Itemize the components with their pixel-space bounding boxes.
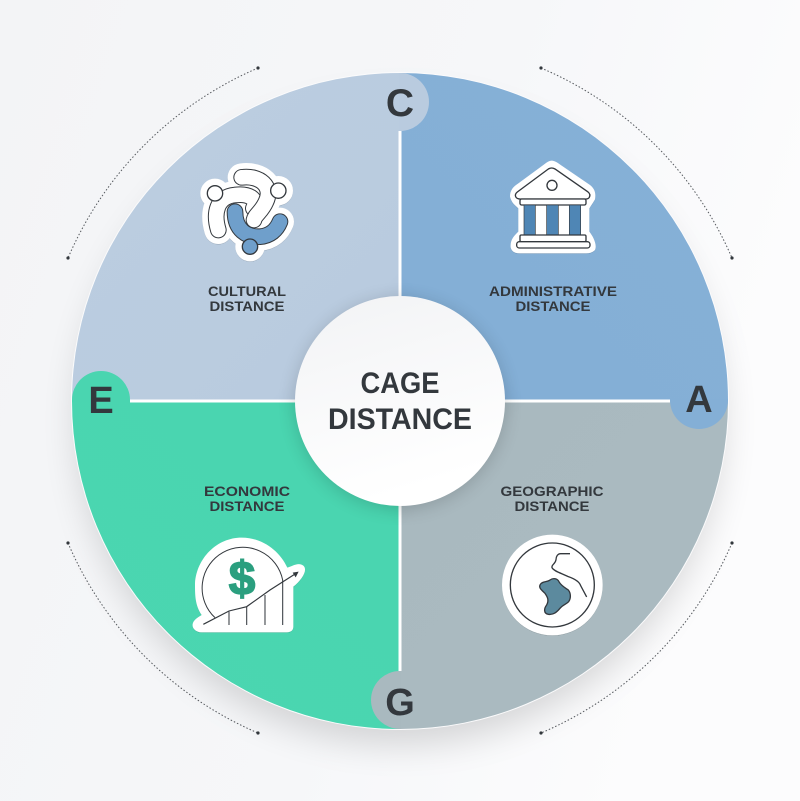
icon: government building: [510, 161, 596, 253]
badge: E: E: [88, 380, 114, 422]
title: DISTANCE: [328, 403, 472, 436]
centre circle: [295, 296, 505, 506]
text: administrative distance: ADMINISTRATIVE: [489, 283, 617, 299]
text: geographic distance: GEOGRAPHIC: [500, 483, 604, 499]
badge: A: [670, 379, 728, 429]
text: geographic distance: DISTANCE: [514, 498, 590, 514]
text: administrative distance: [489, 283, 617, 314]
title: CAGE: [360, 367, 440, 400]
dotted arc: top left: [66, 66, 260, 260]
badge: C: [386, 73, 429, 131]
text: economic distance: DISTANCE: [210, 498, 284, 514]
panel: geographic quadrant: [400, 401, 728, 729]
text: cultural distance: [208, 283, 286, 314]
text: geographic distance: [500, 483, 604, 514]
dotted arc: bottom left: [66, 541, 260, 735]
text: cultural distance: CULTURAL: [208, 283, 286, 299]
icon: dollar growth chart: [193, 538, 305, 632]
icon: dollar growth chart: $: [229, 553, 255, 606]
icon: people circle: [205, 177, 288, 257]
white dividers: [130, 131, 670, 671]
icon: globe: [502, 535, 603, 635]
text: economic distance: ECONOMIC: [204, 483, 290, 499]
panel: administrative quadrant: [400, 73, 728, 401]
title: [328, 367, 472, 436]
badge: A: A: [685, 379, 713, 421]
panel: economic quadrant: [72, 401, 400, 729]
centre circle shadow: [295, 299, 505, 509]
badge: C: C: [386, 82, 414, 125]
text: administrative distance: DISTANCE: [516, 298, 590, 314]
white circle rim: [71, 72, 729, 730]
dotted arc: top right: [539, 66, 734, 260]
circle drop shadow: [78, 100, 722, 744]
badge: G: G: [385, 682, 415, 724]
text: economic distance: [204, 483, 290, 514]
text: cultural distance: DISTANCE: [210, 298, 284, 314]
dotted arc: bottom right: [539, 541, 734, 735]
panel: cultural quadrant: [72, 73, 400, 401]
badge: E: [72, 371, 130, 422]
badge: G: [371, 671, 415, 729]
